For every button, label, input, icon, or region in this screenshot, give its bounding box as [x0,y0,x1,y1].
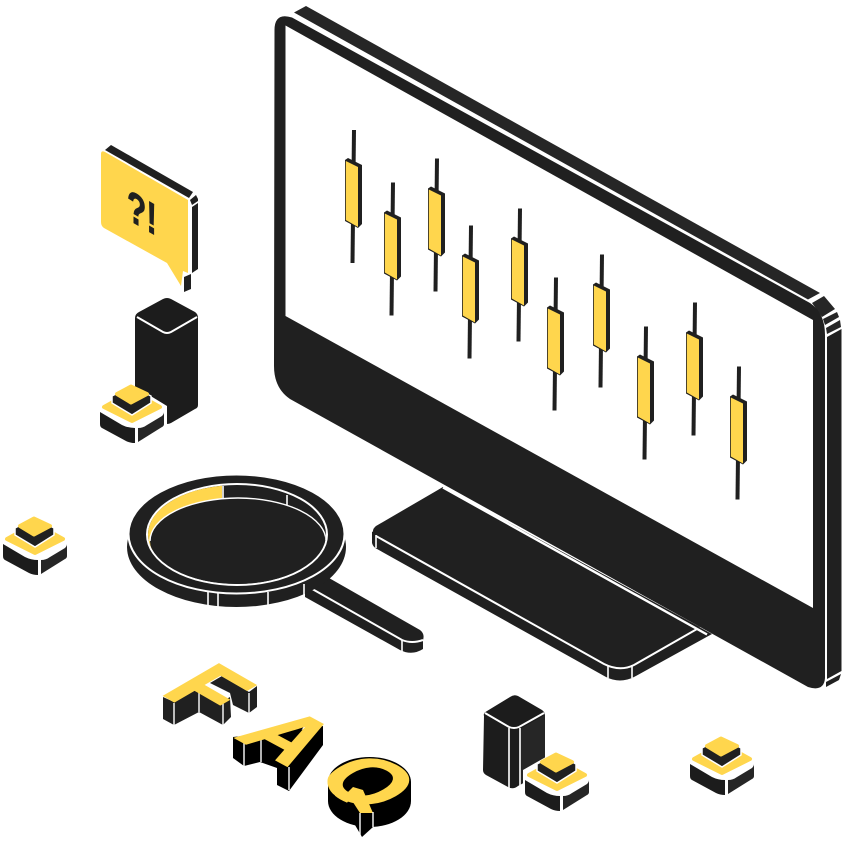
candle 2 [384,182,401,316]
stacked block by tower 2 [523,750,591,813]
monitor right side [826,329,842,687]
candle 4 [462,226,479,358]
monitor stand [372,487,712,680]
FAQ letters [162,663,411,837]
lower bezel edge line [443,488,707,634]
monitor [274,6,842,688]
stacked block by tower 1 [97,384,167,446]
rim dividers [208,584,304,607]
letter A: A [215,696,361,777]
speech bubble [101,145,198,292]
candle 6 [547,278,564,410]
bubble top edge [105,145,193,198]
bubble face [101,151,188,286]
bubble corner and side [184,195,198,292]
handle [305,574,424,653]
candle 3 [428,158,445,292]
lens well [147,484,327,585]
magnifying glass [127,474,424,653]
lens divider ticks [223,486,287,507]
tower block 2 [483,695,545,788]
rim top [128,474,344,594]
candlestick chart [345,130,747,500]
lens glass [150,498,326,584]
monitor front frame [274,16,825,688]
stacked block left [3,518,67,575]
monitor corner segments [812,296,841,334]
candle 10 [730,366,747,500]
candle 7 [593,254,610,388]
letter Q: Q [292,740,442,824]
candle 9 [686,302,703,436]
yellow progress arc [148,486,222,550]
candle 5 [511,208,528,342]
monitor top edge band [294,6,820,300]
letter Q [328,757,411,837]
rim side [127,487,346,607]
candle 8 [637,326,654,460]
letter F: F [142,651,276,729]
screen [286,26,813,608]
candle 1 [345,130,362,263]
tower block 1 [135,298,198,424]
stacked block right [690,738,754,795]
bubble text: ?! [127,179,157,246]
